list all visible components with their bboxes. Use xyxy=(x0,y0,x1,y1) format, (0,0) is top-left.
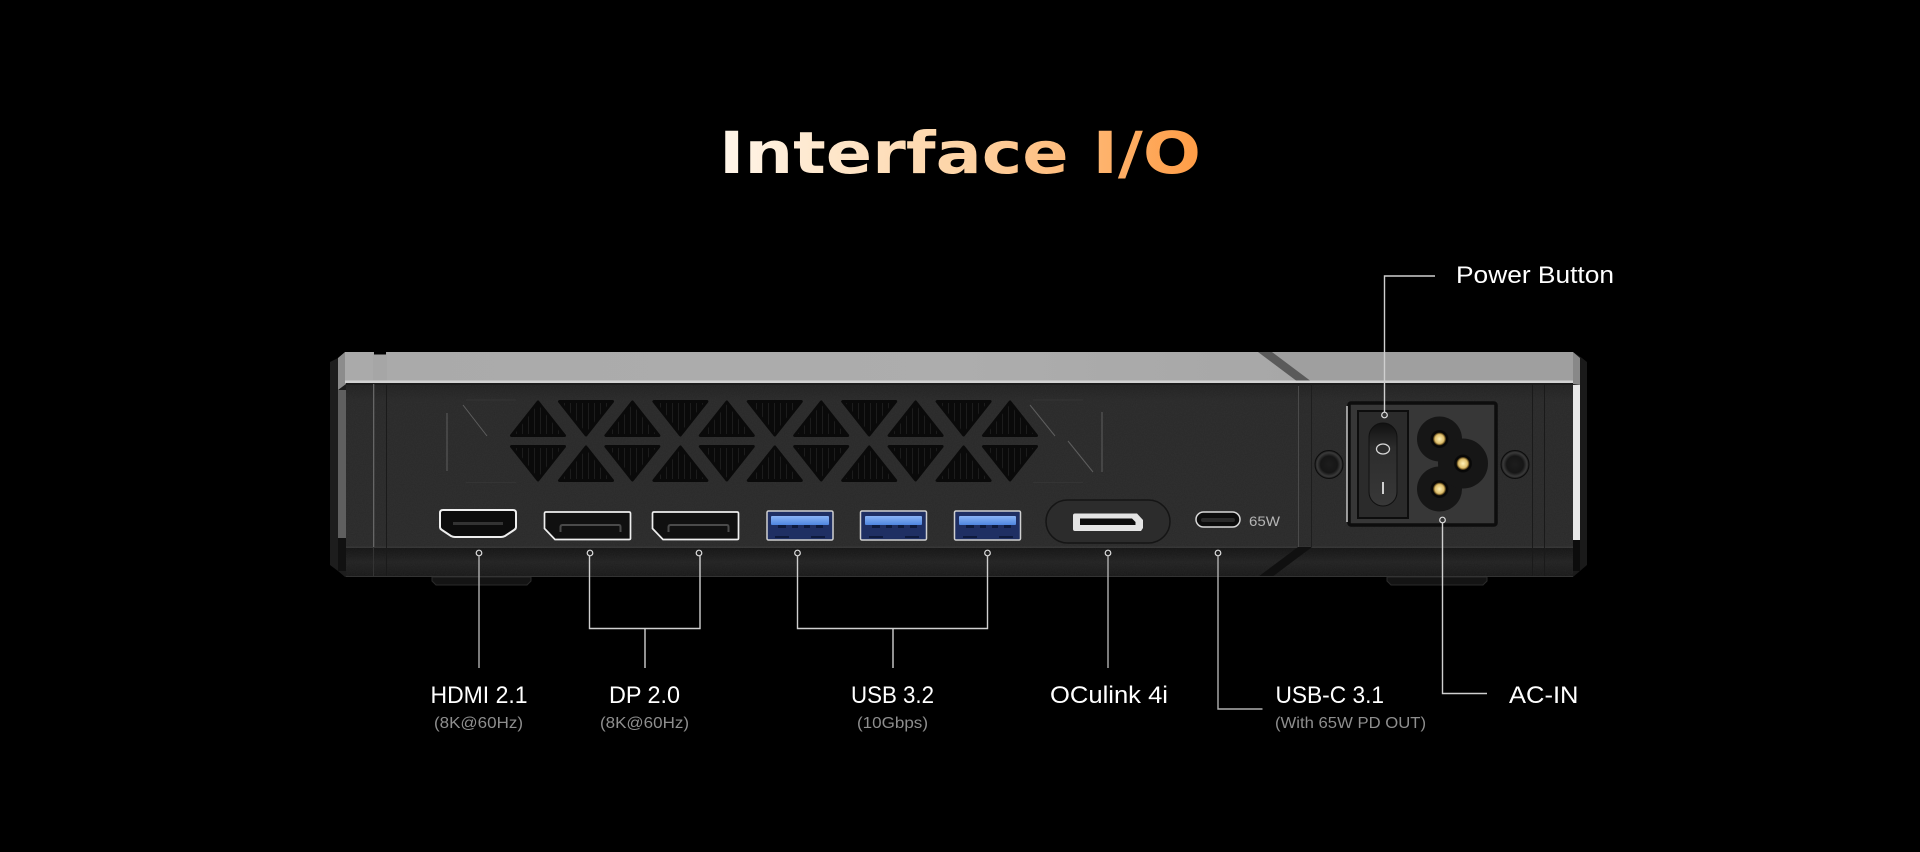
port: USB 3.2 right xyxy=(954,511,1020,540)
vent grille xyxy=(447,400,1102,482)
callout: HDMI xyxy=(430,550,528,732)
callout: USB 3.2: USB 3.2 xyxy=(851,682,934,709)
port: USB-C xyxy=(1196,512,1240,527)
callout: DP: DP 2.0 xyxy=(609,682,680,709)
callout: DP: (8K@60Hz) xyxy=(600,715,689,732)
port: USB 3.2 left xyxy=(767,511,833,540)
port: OCulink xyxy=(1046,500,1170,543)
port: USB 3.2 middle xyxy=(860,511,926,540)
rubber feet xyxy=(432,577,1487,585)
device: mini PC rear view xyxy=(330,352,1587,585)
AC socket xyxy=(1417,416,1488,512)
callout: AC-IN xyxy=(1440,517,1578,709)
label: 65W: 65W xyxy=(1249,513,1281,529)
callout: HDMI: HDMI 2.1 xyxy=(430,682,528,709)
front face xyxy=(346,384,1573,577)
icon: right screw xyxy=(1501,450,1529,478)
callout: DP xyxy=(587,550,702,732)
callout: USB 3.2: (10Gbps) xyxy=(857,715,928,732)
icon: left screw xyxy=(1315,450,1343,478)
callout: USB 3.2 xyxy=(795,550,990,732)
title: Interface I/O xyxy=(719,119,1201,187)
callout: Power Button xyxy=(1382,262,1614,418)
callout: OCulink: OCulink 4i xyxy=(1050,682,1168,709)
power module xyxy=(1347,403,1496,525)
port: HDMI xyxy=(440,510,516,537)
callout: AC-IN: AC-IN xyxy=(1509,682,1578,709)
callout: Power Button: Power Button xyxy=(1456,262,1614,289)
callout: OCulink xyxy=(1050,550,1168,709)
callout: HDMI: (8K@60Hz) xyxy=(434,715,523,732)
port: DP left xyxy=(544,512,630,540)
callout: USB-C: (With 65W PD OUT) xyxy=(1275,715,1426,732)
callout: USB-C xyxy=(1215,550,1426,732)
callout: USB-C: USB-C 3.1 xyxy=(1276,682,1384,709)
right end cap xyxy=(1560,352,1587,577)
power switch xyxy=(1358,411,1408,518)
port: DP right xyxy=(652,512,738,540)
top band xyxy=(345,352,1573,385)
left end cap xyxy=(330,352,352,577)
